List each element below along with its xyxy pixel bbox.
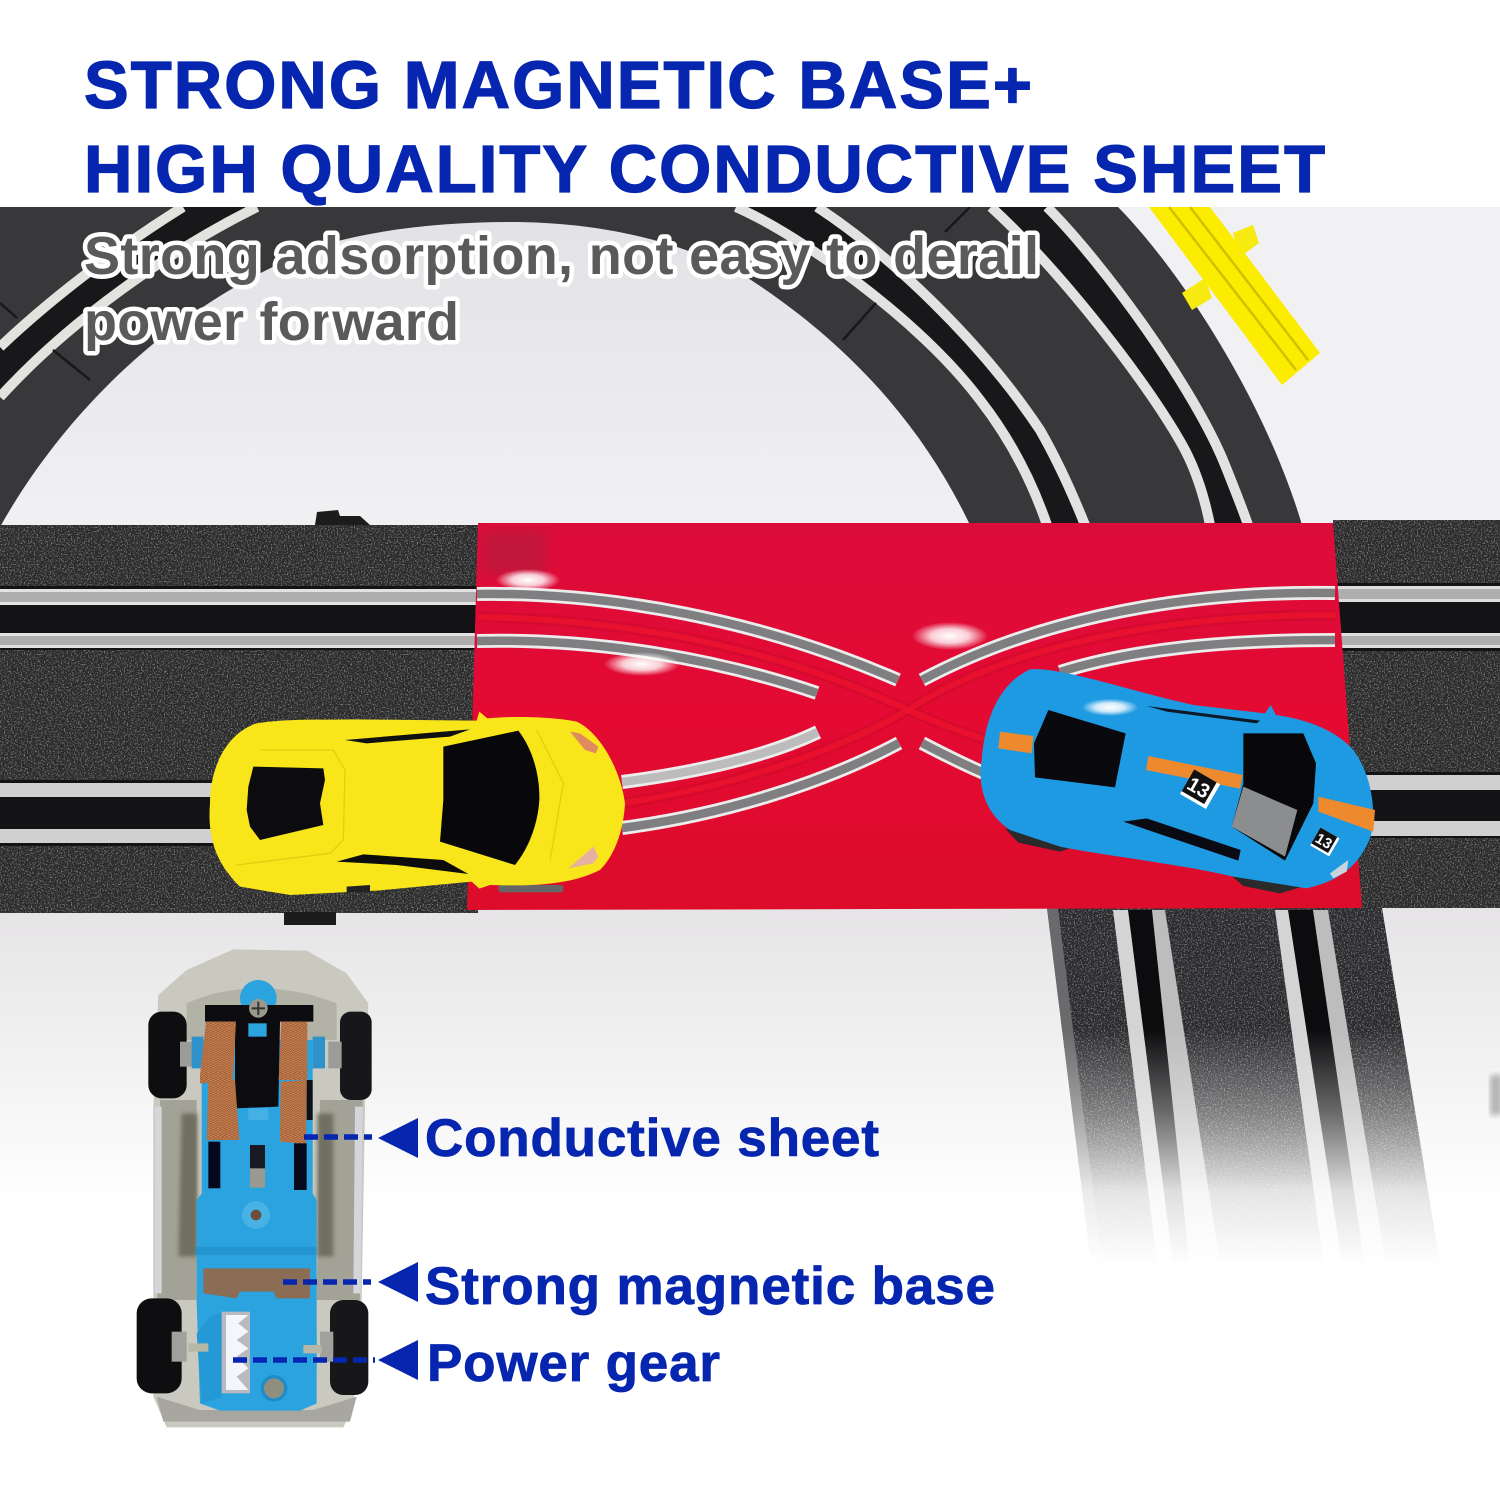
subtitle bbox=[84, 226, 1039, 352]
subtitle: Strong adsorption, not easy to derail bbox=[84, 226, 1039, 286]
curved track ring bbox=[0, 207, 1302, 527]
callout: strong magnetic base: Strong magnetic base bbox=[425, 1257, 995, 1316]
callout: conductive sheet: Conductive sheet bbox=[425, 1109, 879, 1168]
copper braids bbox=[200, 1022, 236, 1083]
title bbox=[84, 48, 1325, 207]
red channels bbox=[478, 615, 1362, 805]
red crossover panel bbox=[467, 523, 1362, 910]
chassis slots bbox=[208, 1142, 220, 1188]
title: STRONG MAGNETIC BASE+ bbox=[84, 48, 1032, 123]
blue car bbox=[981, 669, 1375, 893]
badge 13 small bbox=[1310, 828, 1340, 856]
callout: power gear: Power gear bbox=[427, 1334, 720, 1393]
top black bracket bbox=[205, 1005, 313, 1108]
background bbox=[0, 207, 1500, 1207]
power gear bbox=[197, 1312, 222, 1403]
lower vertical track bbox=[1047, 908, 1436, 1248]
silver crossover rails bbox=[477, 593, 1335, 828]
wheels bbox=[148, 1012, 187, 1098]
badge 13 bbox=[1180, 769, 1220, 809]
magnet bbox=[203, 1268, 310, 1298]
straight track right bbox=[1333, 520, 1500, 908]
straight track left bbox=[0, 510, 478, 925]
right rails pair one bbox=[736, 207, 1085, 525]
subtitle: power forward bbox=[84, 292, 459, 352]
small dark object at right edge bbox=[1490, 1075, 1500, 1115]
right rails pair two bbox=[991, 207, 1248, 525]
badge 13 small: 13 bbox=[1312, 831, 1334, 853]
icon: yellow guardrail bbox=[1149, 207, 1320, 385]
yellow car bbox=[209, 712, 625, 895]
title: HIGH QUALITY CONDUCTIVE SHEET bbox=[84, 132, 1325, 207]
background right of ring bbox=[1118, 207, 1500, 525]
toy car underside bbox=[137, 949, 372, 1427]
callout: power gear bbox=[233, 1334, 720, 1393]
blue chassis bbox=[197, 1040, 317, 1411]
left rails bbox=[0, 207, 257, 397]
badge 13: 13 bbox=[1183, 773, 1213, 803]
